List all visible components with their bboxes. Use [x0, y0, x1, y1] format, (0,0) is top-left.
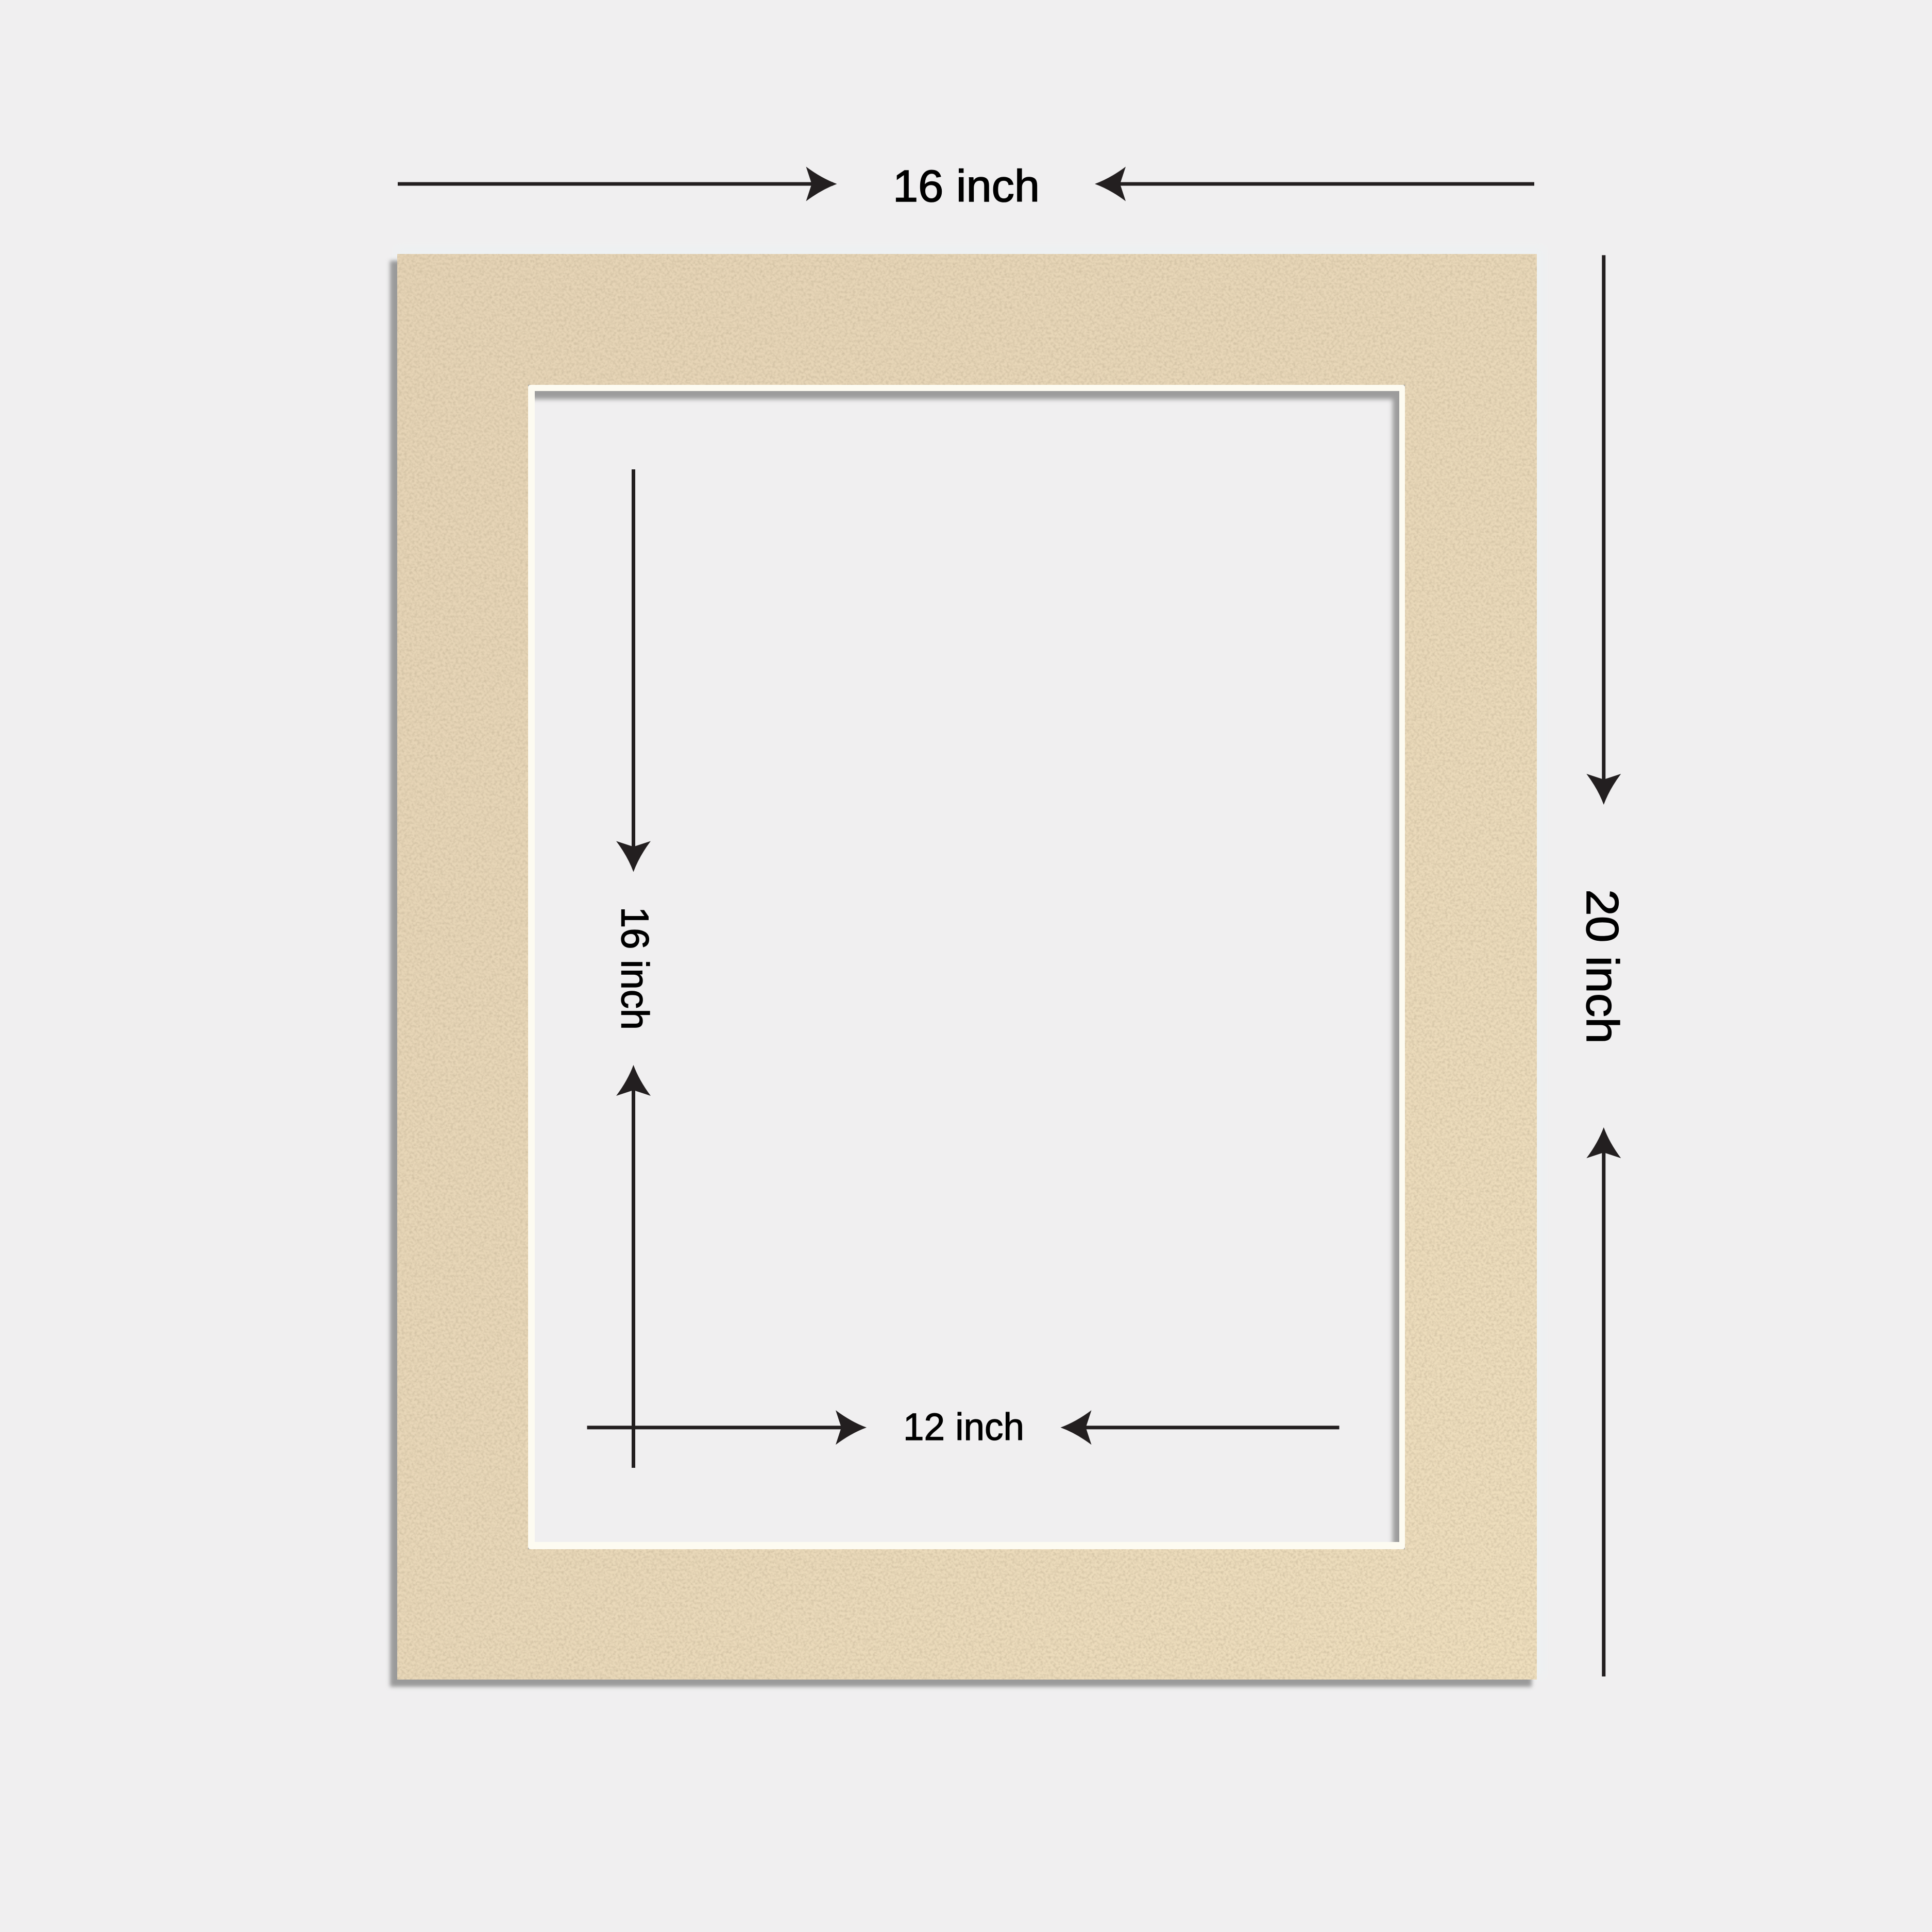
- mat paper grain: [397, 254, 1537, 1680]
- dimension: opening height 16 inch: [614, 469, 657, 1468]
- right arrow: [1095, 167, 1534, 201]
- window inner shadow: [515, 371, 1422, 1566]
- dimension: outer height 20 inch: [1577, 255, 1628, 1676]
- label: 12 inch: [903, 1405, 1024, 1448]
- bottom arrow: [1586, 1127, 1621, 1676]
- left arrow: [398, 167, 837, 201]
- dimension: outer width 16 inch: [398, 161, 1534, 211]
- window opening: [535, 391, 1399, 1542]
- mat surface: [397, 254, 1537, 1680]
- right arrow: [1060, 1410, 1340, 1445]
- left arrow: [587, 1410, 867, 1445]
- label: 16 inch: [893, 161, 1040, 211]
- mat drop shadow: [390, 261, 1532, 1687]
- top arrow: [616, 469, 651, 872]
- dimension: opening width 12 inch: [587, 1405, 1340, 1448]
- label: 16 inch: [614, 907, 657, 1030]
- mat board: [390, 246, 1546, 1687]
- top arrow: [1586, 255, 1621, 805]
- mat halo: [394, 246, 1546, 1679]
- cream bevel edge: [528, 385, 1405, 1549]
- label: 20 inch: [1577, 889, 1628, 1044]
- bottom arrow: [616, 1065, 651, 1468]
